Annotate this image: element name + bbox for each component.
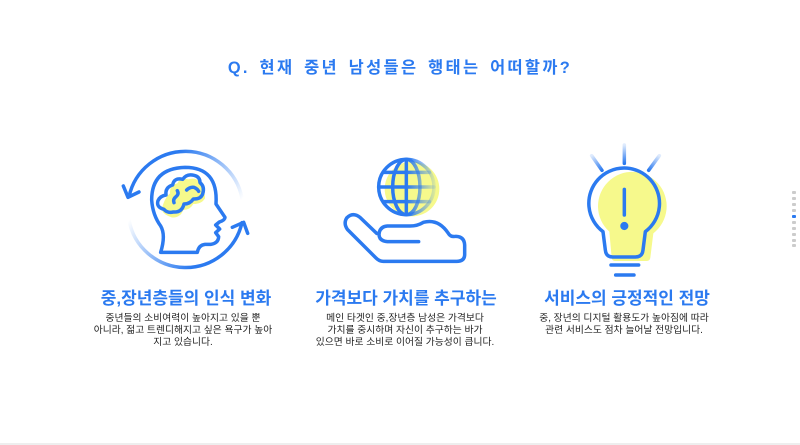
page navigation dots: [792, 191, 796, 247]
base lines: [611, 265, 639, 275]
title: Q. 현재 중년 남성들은 행태는 어떠할까?: [228, 59, 572, 77]
exclamation mark: [619, 189, 630, 215]
text: column 1: [94, 312, 272, 348]
top cycle arrow: [129, 151, 242, 198]
brain folds: [174, 187, 199, 203]
text: column 2: 가치를 중시하며 자신이 추구하는 바가: [327, 325, 483, 336]
bulb outline: [589, 168, 659, 257]
bottom border line: [0, 443, 800, 445]
yellow globe fill: [385, 162, 439, 216]
yellow brain fill: [162, 179, 205, 217]
yellow bulb fill: [598, 172, 667, 261]
text: column 3: 중, 장년의 디지털 활용도가 높아짐에 따라: [539, 312, 709, 324]
heading: column 1: 중,장년층들의 인식 변화: [101, 289, 271, 308]
icon: head with brain and cycle arrows: [123, 151, 248, 268]
text: column 2: 있으면 바로 소비로 이어질 가능성이 큽니다.: [316, 337, 494, 348]
text: column 2: 메인 타겟인 중,장년층 남성은 가격보다: [326, 312, 484, 324]
hand: [345, 215, 465, 261]
globe: [379, 159, 434, 215]
text: column 3: [539, 312, 709, 336]
text: column 1: 중년들의 소비여력이 높아지고 있을 뿐: [105, 312, 261, 324]
heading: column 2: 가격보다 가치를 추구하는: [315, 289, 497, 308]
brain outline: [158, 175, 203, 212]
text: column 2: [316, 312, 494, 348]
heading: column 3: 서비스의 긍정적인 전망: [544, 289, 710, 308]
bottom cycle arrow: [129, 220, 242, 268]
head outline: [152, 167, 225, 252]
text: column 1: 아니라, 젊고 트렌디해지고 싶은 욕구가 높아: [94, 325, 272, 336]
text: column 3: 관련 서비스도 점차 늘어날 전망입니다.: [545, 325, 703, 336]
light rays: [619, 145, 630, 163]
icon: light bulb: [589, 145, 667, 275]
icon: hand holding globe: [345, 159, 465, 261]
text: column 1: 지고 있습니다.: [153, 337, 213, 348]
